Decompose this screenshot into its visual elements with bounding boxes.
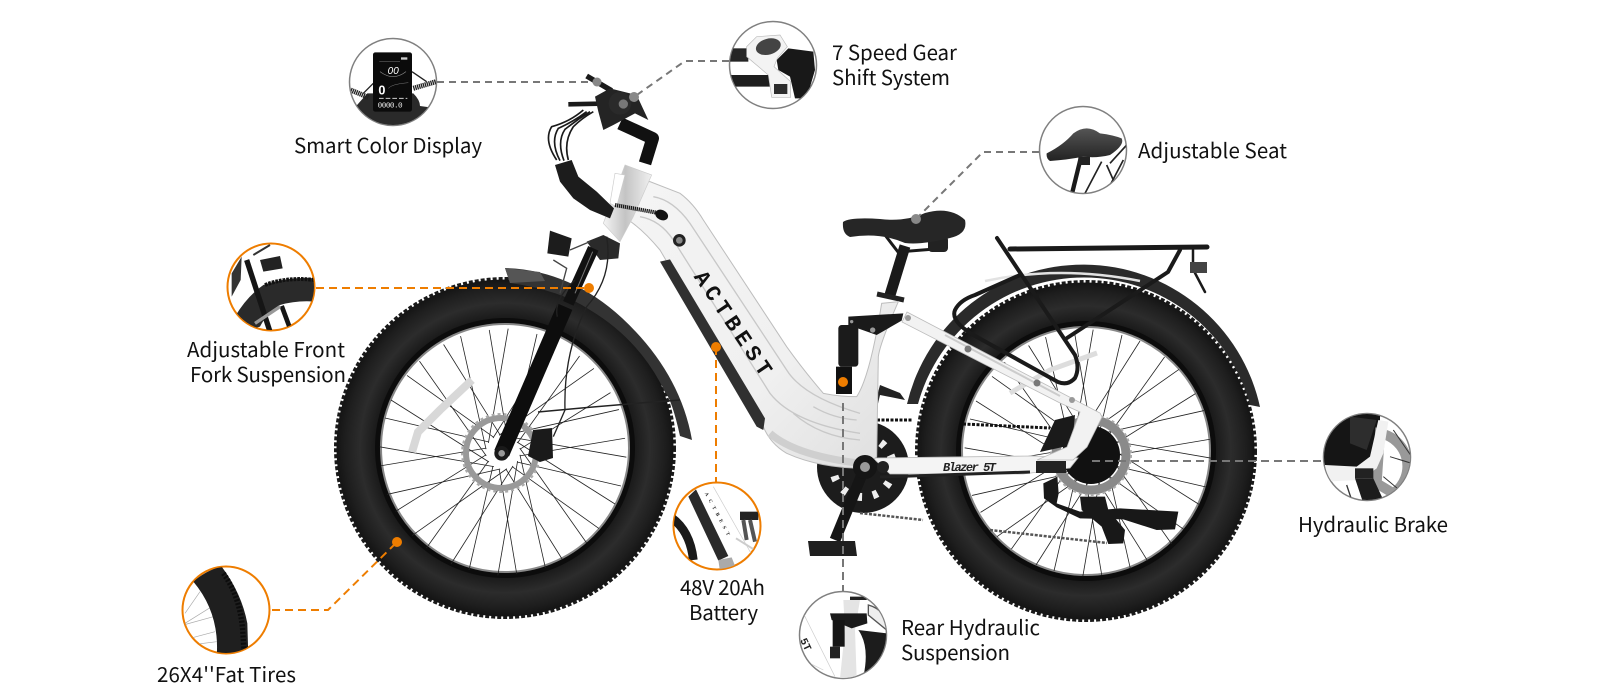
label: adjustable front fork suspension: Fork Suspension	[190, 358, 346, 388]
brand name: ACTBEST	[688, 267, 776, 381]
rear wheel	[916, 282, 1256, 620]
headlight	[547, 231, 572, 257]
connector: rear suspension	[838, 377, 848, 591]
derailleur and kickstand	[1043, 477, 1178, 544]
connector: gear shift	[629, 61, 729, 102]
label: 7 speed gear shift system: Shift System	[832, 61, 950, 91]
power button	[673, 234, 686, 247]
lower fork leg	[502, 307, 565, 453]
frame tube	[628, 182, 898, 468]
label: 7 speed gear shift system	[832, 36, 957, 91]
inset: fat tire	[182, 566, 270, 657]
front wheel	[336, 278, 674, 619]
fork crown	[587, 235, 620, 260]
controls	[595, 88, 648, 130]
connector: display	[437, 78, 602, 86]
upper fork tube	[568, 248, 593, 303]
connector: front fork	[316, 283, 594, 293]
inset: smart color display: 0	[378, 84, 385, 98]
inset: rear suspension: 5T	[796, 637, 813, 654]
connector: battery	[711, 342, 721, 482]
front fender	[505, 268, 692, 440]
battery strip	[660, 259, 765, 430]
connector: seat	[911, 152, 1039, 224]
front disc brake	[462, 414, 553, 492]
inset: smart color display: 00	[388, 66, 399, 77]
cable sleeve	[555, 160, 614, 218]
shifter cable	[615, 205, 657, 213]
label: hydraulic brake: Hydraulic Brake	[1298, 508, 1448, 538]
seat	[843, 211, 965, 243]
inset: seat	[1040, 106, 1127, 195]
rear chainstay with Blazer 5T label: Blazer 5T	[943, 461, 997, 475]
inset: battery: ACTBEST	[703, 492, 730, 538]
label: 7 speed gear shift system: 7 Speed Gear	[832, 36, 957, 66]
front fork and headlight	[494, 231, 620, 461]
label: adjustable seat: Adjustable Seat	[1138, 134, 1287, 164]
rear chainstay with Blazer 5T label	[873, 456, 1078, 477]
inset: rear suspension	[796, 592, 887, 678]
connector: hydraulic brake	[1092, 460, 1323, 462]
rear seat stay and dropout	[902, 312, 1102, 460]
rear disc brake and hub	[1040, 415, 1131, 495]
label: battery	[680, 571, 765, 626]
infographic canvas	[158, 20, 1448, 682]
inset: smart color display	[350, 38, 436, 127]
rear fender	[907, 265, 1260, 407]
inset: smart color display: 0000.0	[378, 102, 403, 110]
label: adjustable front fork suspension: Adjustable Front	[187, 333, 345, 363]
handlebar assembly	[548, 76, 670, 222]
seat post	[877, 235, 948, 300]
main frame	[548, 76, 898, 468]
label: adjustable front fork suspension	[187, 333, 346, 388]
label: rear hydraulic suspension: Rear Hydraulic	[901, 611, 1040, 641]
inset: gear shifter	[728, 22, 816, 108]
e-bike illustration	[336, 76, 1260, 621]
stem and grip	[620, 123, 653, 163]
crank and pedal	[808, 455, 889, 556]
label: fat tires: 26X4''Fat Tires	[157, 658, 296, 688]
brake lever	[568, 96, 617, 111]
fork cables	[553, 237, 608, 437]
chain and chainring	[817, 385, 1107, 543]
inset: hydraulic brake	[1322, 413, 1412, 503]
label: battery: Battery	[689, 596, 758, 626]
connector: tires	[272, 537, 402, 610]
label: rear hydraulic suspension: Suspension	[901, 636, 1010, 666]
brake cables	[548, 110, 593, 161]
label: rear hydraulic suspension	[901, 611, 1040, 666]
label: battery: 48V 20Ah	[680, 571, 765, 601]
rear rack	[954, 238, 1207, 383]
inset: front fork suspension	[228, 244, 317, 332]
label: smart color display: Smart Color Display	[294, 129, 482, 159]
rear shock	[836, 313, 903, 394]
head tube	[603, 165, 652, 242]
inset: battery	[670, 482, 760, 572]
